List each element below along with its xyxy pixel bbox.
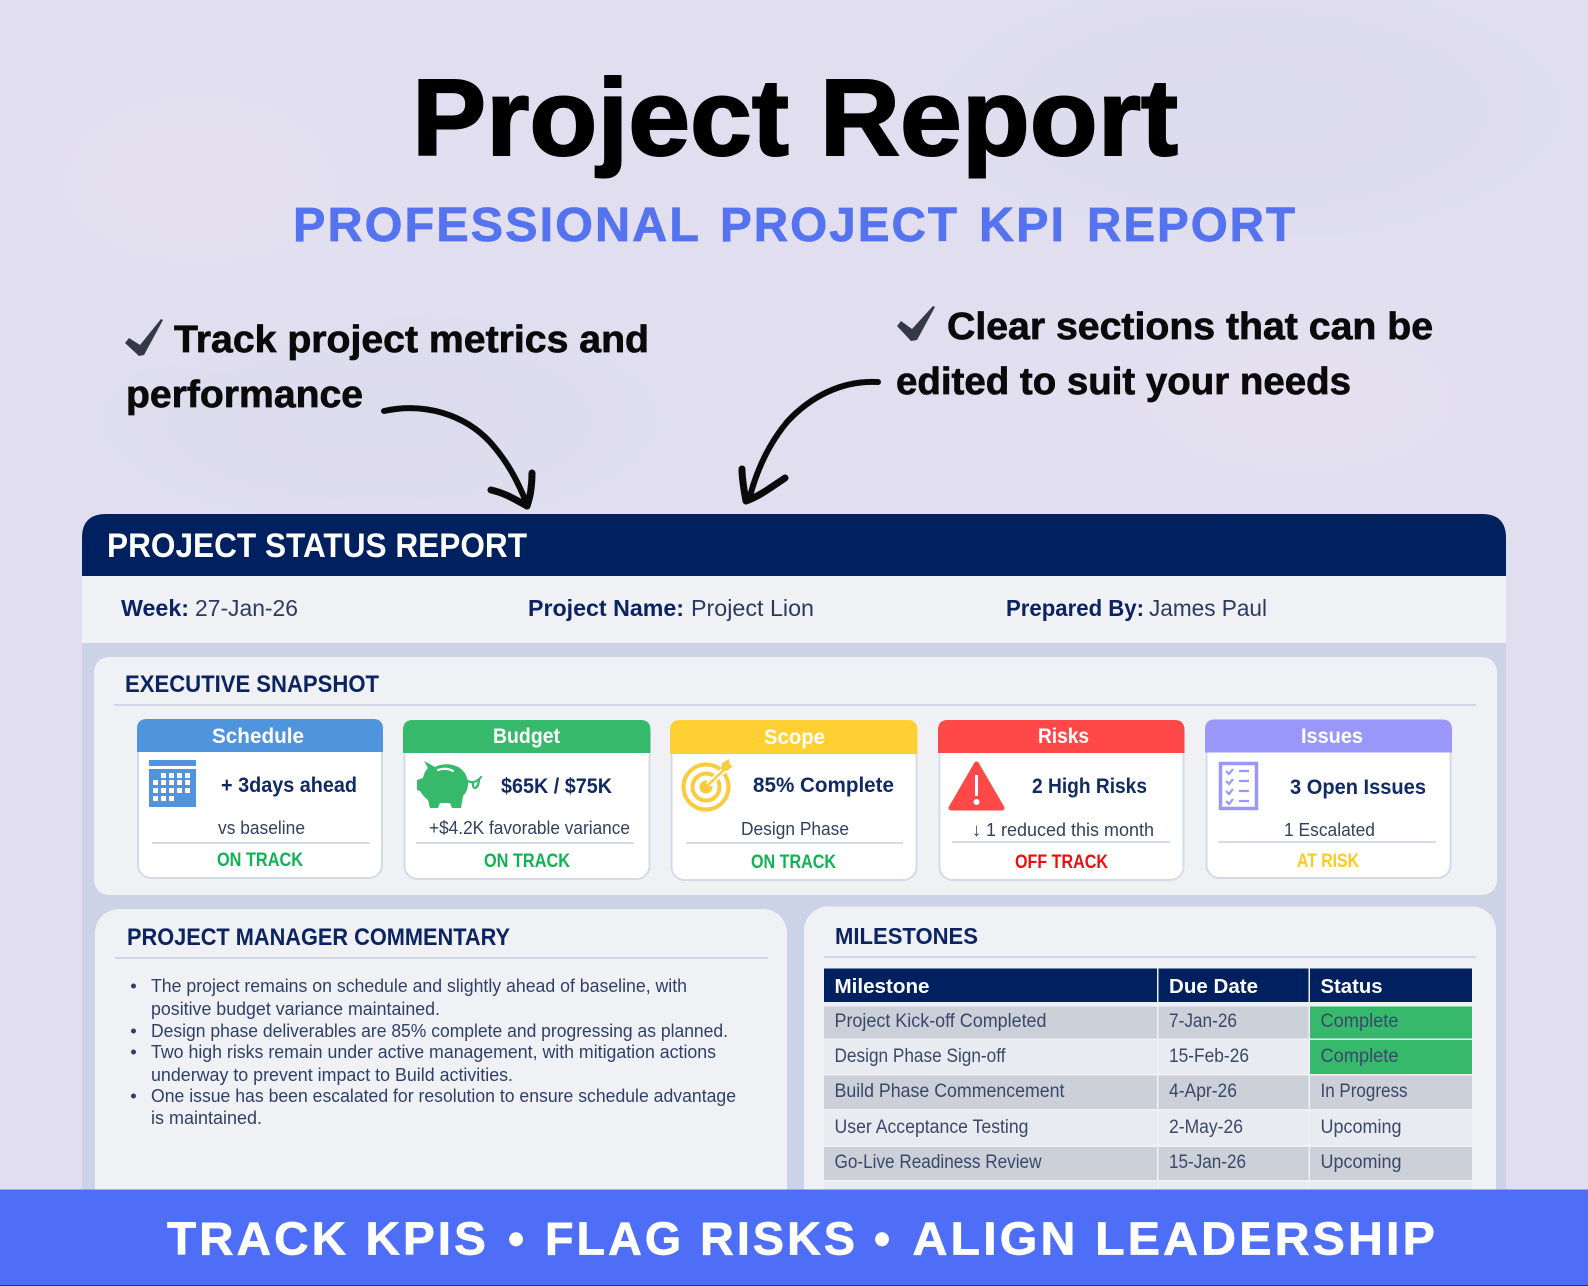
heading: executive snapshot: EXECUTIVE SNAPSHOT: [125, 671, 379, 698]
icon: right check mark: [897, 306, 935, 341]
bottom banner: •: [508, 1212, 527, 1264]
report info band: 27-Jan-26: [195, 595, 298, 621]
callout: track metrics: performance: [126, 374, 363, 416]
card: budget: [403, 720, 650, 879]
card: budget: Budget: [493, 725, 560, 748]
card: issues: AT RISK: [1297, 850, 1359, 872]
commentary bullets: Two high risks remain under active management, with mitigation actions: [151, 1041, 716, 1062]
report info band: Prepared By:: [1006, 595, 1144, 621]
bottom banner: [0, 1190, 1588, 1286]
title: Project Report: [412, 57, 1178, 179]
heading: commentary: PROJECT MANAGER COMMENTARY: [127, 924, 510, 951]
panel: executive snapshot: [94, 657, 1497, 895]
report header band: PROJECT STATUS REPORT: [107, 527, 527, 565]
commentary bullets: is maintained.: [151, 1107, 262, 1128]
milestones table: Upcoming: [1320, 1117, 1402, 1138]
report dashboard: [82, 514, 1506, 1249]
milestones table: 7-Jan-26: [1169, 1011, 1237, 1032]
milestones table: Upcoming: [1320, 1152, 1402, 1173]
card: scope: Design Phase: [741, 818, 849, 839]
subtitle: KPI: [979, 199, 1066, 252]
card: schedule: ON TRACK: [217, 849, 303, 871]
commentary bullets: underway to prevent impact to Build activities.: [151, 1064, 513, 1085]
milestones table: 15-Feb-26: [1169, 1046, 1249, 1067]
card: issues: Issues: [1301, 725, 1363, 748]
subtitle: [293, 199, 1297, 252]
bottom banner: ALIGN LEADERSHIP: [912, 1212, 1438, 1264]
commentary bullets: [131, 975, 736, 1128]
card: schedule: Schedule: [212, 725, 304, 748]
card: scope: [670, 720, 918, 880]
callout: clear sections: Clear sections that can be: [947, 306, 1433, 348]
report info band: Week:: [121, 595, 189, 621]
report info band: [82, 576, 1506, 643]
milestones table: User Acceptance Testing: [834, 1117, 1028, 1138]
card: budget: +$4.2K favorable variance: [429, 817, 630, 838]
card: issues: [1205, 720, 1452, 878]
commentary bullets: The project remains on schedule and slightly ahead of baseline, with: [151, 975, 687, 996]
card: scope: ON TRACK: [751, 851, 836, 873]
report info band: James Paul: [1149, 595, 1267, 621]
milestones table: Project Kick-off Completed: [834, 1011, 1046, 1032]
arrow: right: [742, 382, 878, 501]
milestones table: [824, 968, 1472, 1192]
milestones table: Complete: [1320, 1046, 1398, 1067]
milestones table: 4-Apr-26: [1169, 1081, 1237, 1102]
milestones table: Due Date: [1169, 976, 1258, 998]
milestones table: 2-May-26: [1169, 1117, 1243, 1138]
heading: milestones: MILESTONES: [835, 923, 978, 949]
milestones table: Milestone: [834, 976, 930, 998]
commentary bullets: One issue has been escalated for resolution to ensure schedule advantage: [151, 1085, 736, 1106]
commentary bullets: Design phase deliverables are 85% complete and progressing as planned.: [151, 1020, 728, 1041]
arrow: left: [384, 408, 532, 506]
card: schedule: [137, 719, 383, 878]
bottom banner: TRACK KPIS: [167, 1212, 489, 1264]
subtitle: PROJECT: [720, 199, 959, 252]
milestones table: Build Phase Commencement: [834, 1081, 1065, 1102]
card: budget: $65K / $75K: [501, 775, 612, 798]
callout: clear sections: edited to suit your needs: [896, 361, 1351, 403]
callout: track metrics: Track project metrics and: [174, 319, 649, 361]
panel: milestones: [804, 906, 1496, 1246]
card: issues: 3 Open Issues: [1290, 776, 1426, 799]
report header band: [82, 514, 1506, 576]
panel: project manager commentary: [95, 909, 787, 1249]
card: schedule: + 3days ahead: [221, 774, 357, 797]
icon: left check mark: [125, 319, 163, 356]
milestones table: Complete: [1320, 1011, 1398, 1032]
icon: warning triangle: [951, 764, 1002, 808]
icon: piggy bank: [417, 761, 481, 808]
card: scope: Scope: [764, 726, 825, 749]
subtitle: PROFESSIONAL: [293, 199, 701, 252]
card: schedule: vs baseline: [218, 817, 305, 838]
card: scope: 85% Complete: [753, 774, 894, 797]
bottom banner: FLAG RISKS: [545, 1212, 858, 1264]
icon: calendar: [149, 760, 196, 807]
card: issues: 1 Escalated: [1284, 819, 1375, 840]
icon: target: [684, 759, 733, 810]
card: risks: Risks: [1038, 725, 1089, 748]
card: risks: 2 High Risks: [1032, 775, 1147, 798]
card: budget: ON TRACK: [484, 850, 570, 872]
report info band: Project Lion: [691, 595, 814, 621]
bottom banner: •: [874, 1212, 893, 1264]
card: risks: ↓ 1 reduced this month: [972, 819, 1154, 840]
milestones table: Design Phase Sign-off: [834, 1046, 1006, 1067]
milestones table: In Progress: [1320, 1081, 1408, 1102]
icon: checklist: [1220, 764, 1256, 808]
milestones table: Go-Live Readiness Review: [834, 1152, 1042, 1173]
callout: track metrics: [125, 319, 649, 416]
subtitle: REPORT: [1087, 199, 1297, 252]
milestones table: 15-Jan-26: [1169, 1152, 1246, 1173]
card: risks: OFF TRACK: [1015, 851, 1108, 873]
report info band: Project Name:: [528, 595, 684, 621]
card: risks: [938, 720, 1184, 880]
milestones table: Status: [1320, 976, 1382, 998]
callout: clear sections: [896, 306, 1433, 403]
commentary bullets: positive budget variance maintained.: [151, 998, 440, 1019]
